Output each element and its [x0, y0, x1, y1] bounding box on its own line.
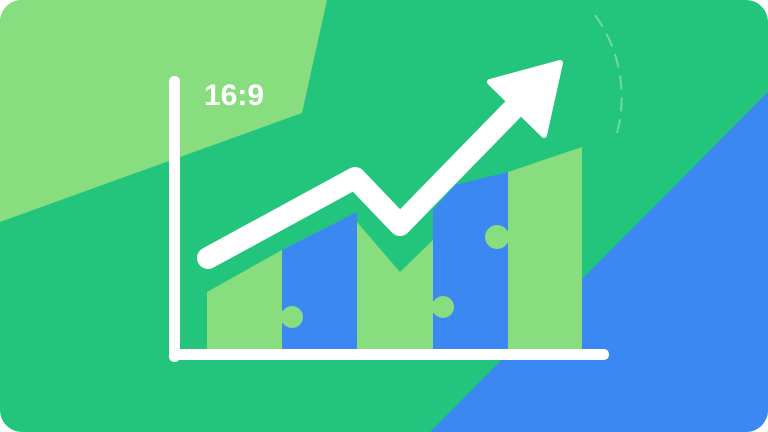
- label 16:9: 16:9: [204, 79, 264, 112]
- bars with puzzle tabs: [207, 147, 582, 350]
- arrow: [208, 63, 560, 258]
- axes: [169, 76, 609, 362]
